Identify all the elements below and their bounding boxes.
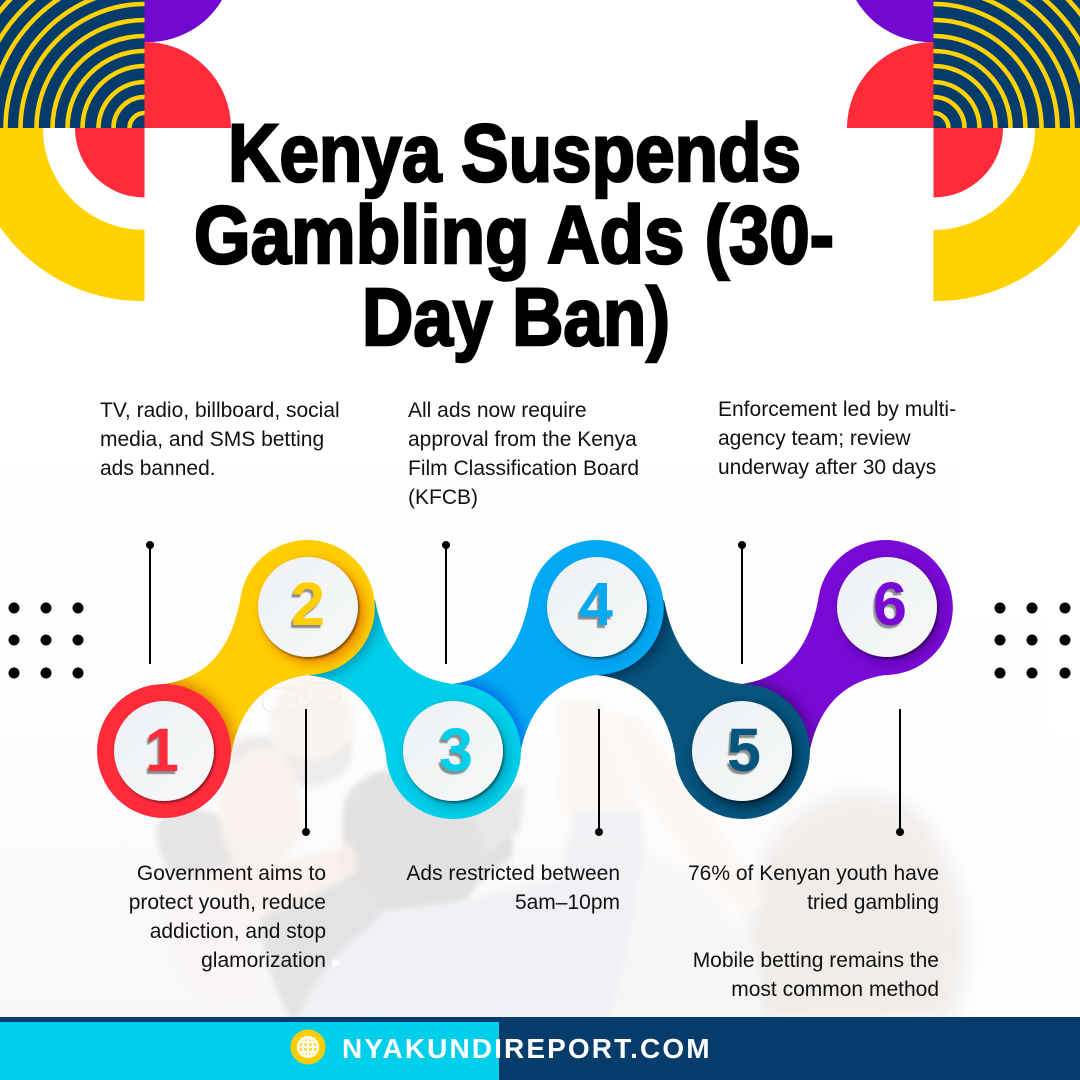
- text: enforcement: [718, 398, 956, 479]
- text: youth statistics: most common method: [731, 978, 939, 1001]
- text: KFCB approval: Film Classification Board: [408, 457, 639, 480]
- footer bar: [0, 1017, 1080, 1080]
- right woman's hair: [748, 794, 964, 1018]
- step numbers: 2: [291, 570, 325, 638]
- top-left corner decoration: [0, 0, 231, 301]
- text: KFCB approval: [408, 399, 639, 509]
- left woman's face and neck: [220, 747, 300, 870]
- text: ad hours: 5am–10pm: [515, 891, 620, 914]
- text: KFCB approval: All ads now require: [408, 399, 587, 422]
- centre man's shirt: [298, 810, 645, 1018]
- text: banned media: TV, radio, billboard, social: [100, 399, 340, 422]
- footer cyan block: [0, 1022, 499, 1080]
- segment 3: cyan: [308, 600, 521, 819]
- dot grid left: [8, 602, 84, 678]
- text: youth statistics: [688, 862, 939, 1001]
- step numbers: 1: [145, 716, 179, 784]
- text: ad hours: [406, 862, 620, 914]
- step numbers: 5: [727, 716, 761, 784]
- raised arms: [560, 700, 640, 815]
- text: government aims: Government aims to: [137, 862, 326, 885]
- title: Kenya Suspends: [228, 108, 801, 199]
- centre man's ear: [337, 844, 357, 876]
- text: enforcement: Enforcement led by multi-: [718, 398, 956, 421]
- website address: NYAKUNDIREPORT.COM: [342, 1033, 712, 1064]
- segment 4: blue: [453, 540, 664, 752]
- text: banned media: [100, 399, 340, 480]
- step numbers: 4: [579, 570, 613, 638]
- man's face and beard: [270, 675, 354, 775]
- text: KFCB approval: approval from the Kenya: [408, 428, 637, 451]
- text: government aims: glamorization: [201, 949, 326, 972]
- title: [194, 108, 834, 364]
- step numbers: [145, 570, 907, 784]
- text: government aims: addiction, and stop: [150, 920, 326, 943]
- segment 1: red ring: [97, 684, 231, 818]
- text: youth statistics: Mobile betting remains the: [693, 949, 939, 972]
- text: government aims: [129, 862, 326, 972]
- text: youth statistics: tried gambling: [807, 891, 939, 914]
- left woman's hair: [157, 809, 240, 878]
- text: banned media: media, and SMS betting: [100, 428, 324, 451]
- man's glasses: [263, 683, 340, 712]
- text: youth statistics: 76% of Kenyan youth have: [688, 862, 939, 885]
- woman's white shirt: [600, 850, 760, 1018]
- text: ad hours: Ads restricted between: [406, 862, 620, 885]
- leader lines: [146, 541, 904, 836]
- text: enforcement: agency team; review: [718, 427, 911, 450]
- step numbers: 3: [439, 716, 473, 784]
- title: Day Ban): [362, 272, 670, 363]
- segment 5: navy: [597, 600, 810, 819]
- numbered step chain: [97, 540, 953, 836]
- centre man's hair: [342, 768, 513, 915]
- segment 2: yellow: [164, 540, 375, 755]
- segment 6: purple: [742, 540, 953, 752]
- dot grid right: [994, 602, 1070, 678]
- icon: globe: [290, 1030, 326, 1064]
- step numbers: 6: [873, 570, 907, 638]
- text: banned media: ads banned.: [100, 457, 216, 480]
- title: Gambling Ads (30-: [194, 190, 834, 281]
- left woman's arm: [162, 880, 262, 1006]
- text: KFCB approval: (KFCB): [408, 486, 478, 509]
- text: enforcement: underway after 30 days: [718, 456, 936, 479]
- text: government aims: protect youth, reduce: [129, 891, 326, 914]
- number discs: [114, 557, 937, 801]
- gray body between figures: [253, 870, 385, 1018]
